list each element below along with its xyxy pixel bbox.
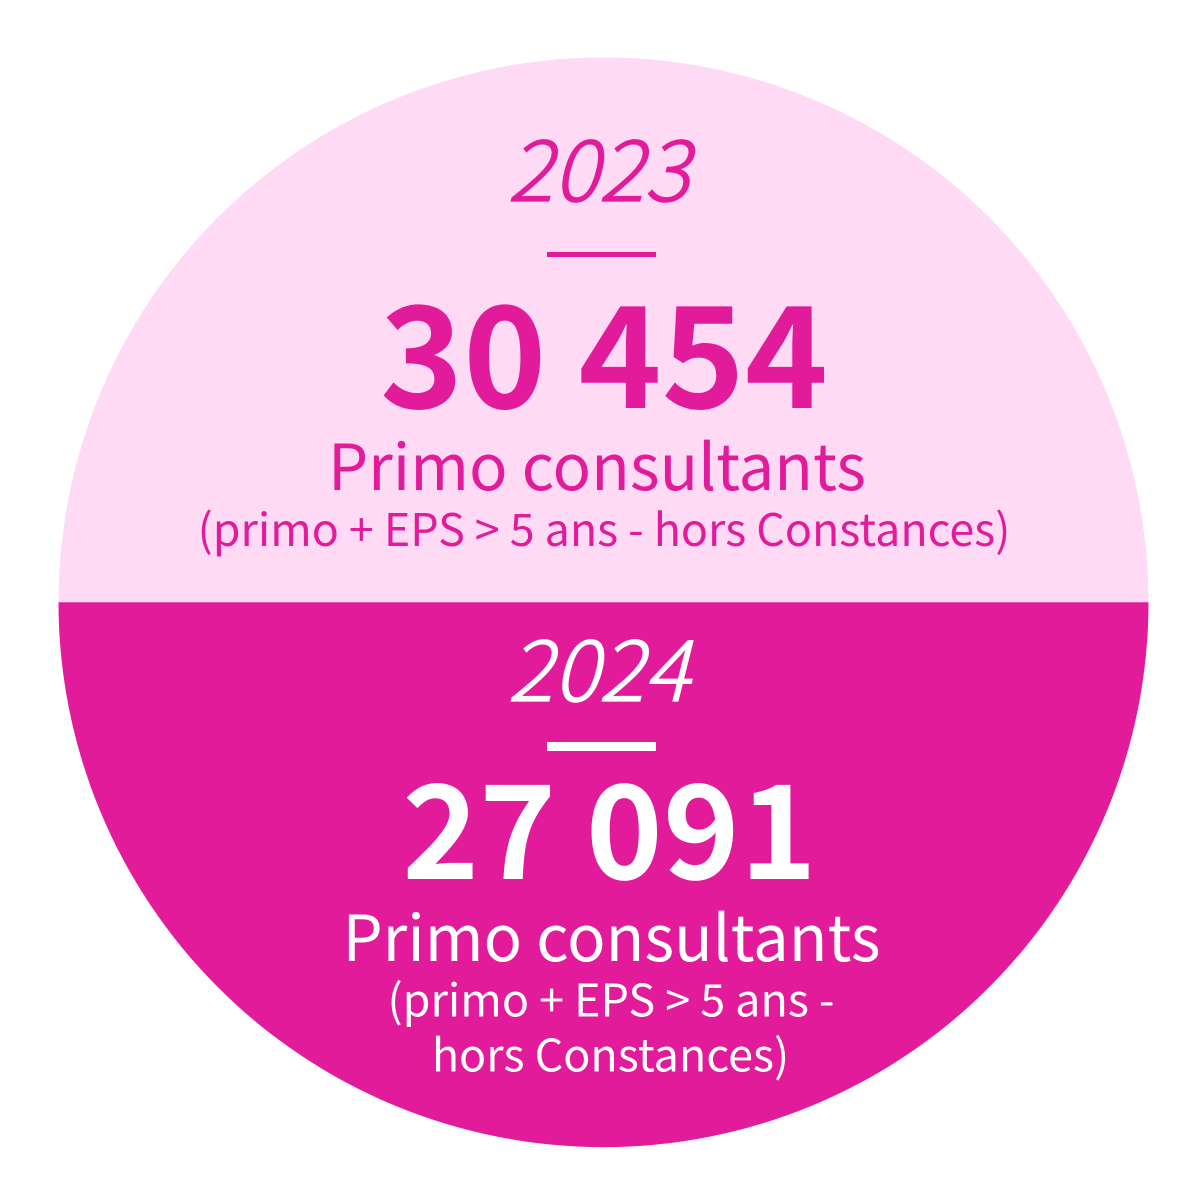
note 2024 line 1: (primo + EPS > 5 ans - [388, 964, 834, 1030]
panel: 2023 upper half circle [58, 57, 1148, 602]
year 2023: 2023 [508, 103, 697, 226]
section: 2023 content [198, 103, 1010, 559]
note 2024 line 2: hors Constances) [432, 1020, 789, 1084]
number 30 454: 30 454 [380, 244, 828, 449]
label primo consultants 2023: Primo consultants [328, 417, 866, 509]
note 2023: (primo + EPS > 5 ans - hors Constances) [198, 494, 1010, 559]
label primo consultants 2024: Primo consultants [342, 888, 881, 980]
divider 2024 [547, 742, 656, 751]
number 27 091: 27 091 [402, 728, 817, 917]
section: 2024 content [342, 603, 881, 1084]
year 2024: 2024 [508, 603, 693, 726]
divider 2023 [547, 252, 656, 257]
panel: 2024 lower half circle [58, 602, 1148, 1147]
